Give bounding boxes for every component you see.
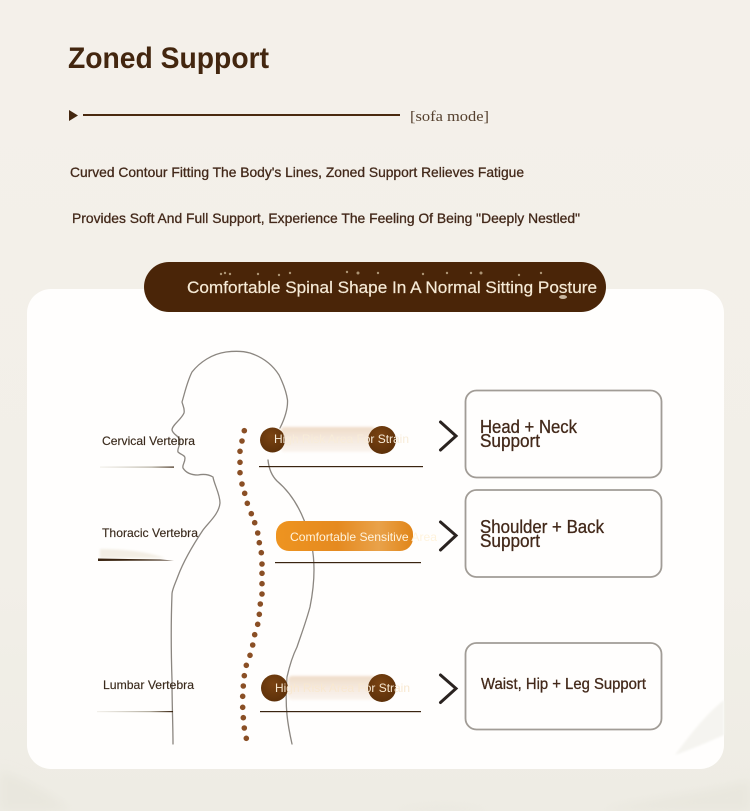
decorative leaf on card	[675, 700, 724, 755]
arrow: lumbar	[440, 675, 456, 702]
decorative leaf background	[0, 770, 750, 811]
box: shoulder and back support: Support	[480, 531, 540, 551]
heading pill	[144, 262, 606, 312]
box: head and neck support: Head + Neck	[480, 417, 578, 437]
box: waist hip and leg support: Waist, Hip + Leg Support	[481, 676, 647, 693]
heading pill: Comfortable Spinal Shape In A Normal Sitting Posture	[187, 278, 597, 297]
description line 2: Provides Soft And Full Support, Experience The Feeling Of Being "Deeply Nestled"	[72, 210, 580, 226]
pill: comfortable sensitive area, back	[275, 521, 437, 563]
body silhouette outline	[171, 351, 314, 744]
box: shoulder and back support: Shoulder + Back	[480, 517, 605, 537]
label: cervical vertebra	[100, 434, 195, 468]
spine dots	[237, 428, 265, 741]
arrow: neck	[440, 422, 456, 450]
pill: high risk area, lumbar	[260, 674, 421, 712]
arrow: back	[440, 522, 456, 550]
icon: triangle marker	[69, 110, 78, 121]
label: lumbar vertebra: Lumbar Vertebra	[103, 678, 194, 692]
box: head and neck support: Support	[480, 431, 540, 451]
panel: white card	[27, 289, 724, 769]
box: shoulder and back support	[466, 490, 662, 577]
description line 1: Curved Contour Fitting The Body's Lines, Zoned Support Relieves Fatigue	[70, 164, 524, 180]
box: waist hip and leg support	[466, 643, 662, 730]
ghost text specks	[220, 271, 567, 299]
title: Zoned Support	[68, 42, 269, 75]
pill: high risk area, lumbar: High Risk Area For Strain	[275, 681, 410, 695]
pill: high risk area, neck	[259, 426, 423, 467]
section rule with sofa mode tag	[69, 109, 489, 125]
label: thoracic vertebra	[98, 526, 198, 561]
box: head and neck support	[466, 390, 662, 478]
label: lumbar vertebra	[97, 678, 194, 712]
pill: high risk area, neck: High Risk Area For Strain	[274, 432, 409, 446]
section rule with sofa mode tag: [sofa mode]	[410, 109, 489, 125]
label: cervical vertebra: Cervical Vertebra	[102, 434, 195, 448]
label: thoracic vertebra: Thoracic Vertebra	[102, 526, 198, 540]
pill: comfortable sensitive area, back: Comfortable Sensitive Area	[290, 530, 437, 544]
